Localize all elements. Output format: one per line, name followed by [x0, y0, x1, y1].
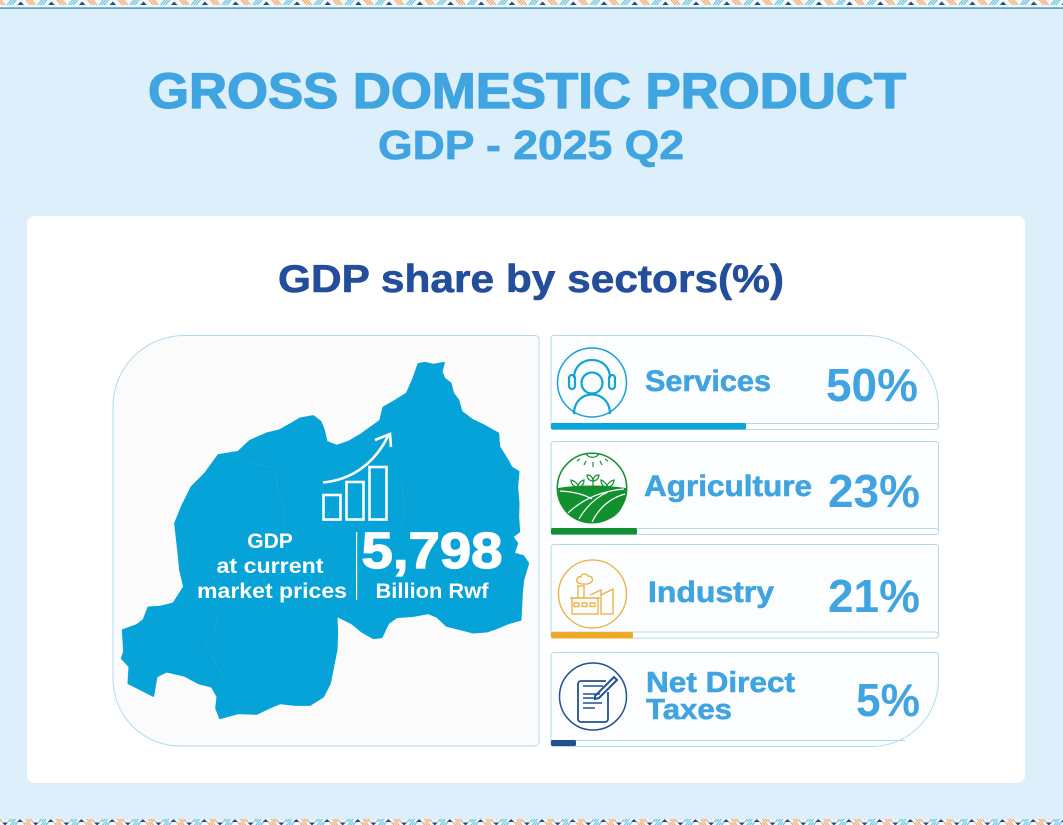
label: Taxes [646, 694, 732, 726]
label [646, 667, 795, 726]
icon: factory [558, 560, 626, 628]
GDP label: at current [216, 555, 324, 578]
panel: services [551, 335, 938, 430]
GDP label: market prices [197, 580, 347, 603]
value: 50% [826, 359, 918, 411]
progress bar [551, 528, 938, 534]
top decorative border [0, 0, 1063, 9]
value: 23% [828, 465, 920, 517]
progress bar [551, 740, 905, 746]
panel: agriculture [551, 442, 938, 534]
GDP value [362, 522, 502, 603]
GDP label: GDP [247, 530, 293, 553]
icon: document and pen [560, 663, 626, 730]
GDP value: Billion Rwf [376, 580, 490, 603]
icon: crop field [557, 453, 627, 523]
panel: industry [551, 544, 938, 638]
subtitle: GDP - 2025 Q2 [378, 122, 684, 168]
value: 21% [828, 570, 920, 622]
label: Services [645, 365, 771, 398]
progress bar [551, 423, 938, 430]
value: 5% [856, 674, 920, 726]
progress bar [551, 632, 938, 638]
GDP value: 5,798 [362, 522, 502, 579]
panel heading: GDP share by sectors(%) [278, 258, 784, 301]
label: Agriculture [644, 470, 812, 503]
bottom decorative border [0, 819, 1063, 825]
panel: net direct taxes [551, 652, 938, 746]
icon: headset person [558, 348, 626, 417]
GDP label [197, 530, 347, 603]
divider [356, 532, 357, 600]
label: Industry [648, 576, 774, 609]
main white panel [27, 216, 1025, 783]
label: Net Direct [646, 667, 795, 699]
title: GROSS DOMESTIC PRODUCT [148, 63, 906, 119]
icon: bar chart with rising arrow [323, 434, 391, 520]
Rwanda map shape [122, 363, 528, 718]
panel: map [113, 336, 539, 746]
